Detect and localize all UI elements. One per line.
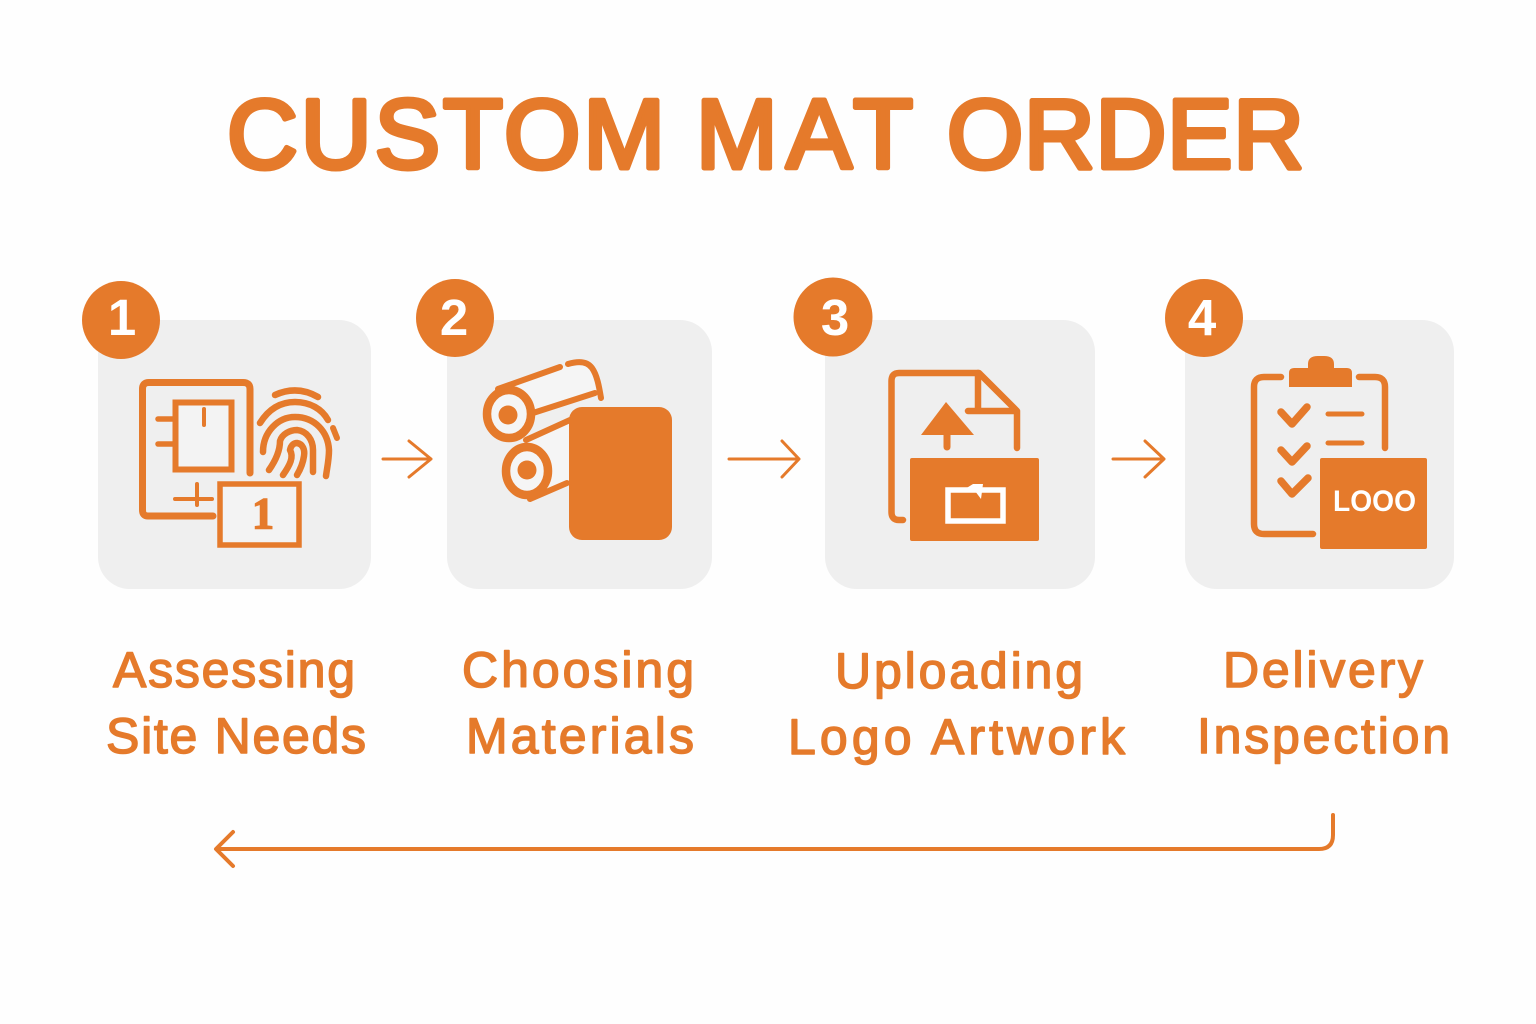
panel: step 4 delivery inspection (1165, 279, 1454, 589)
title (227, 79, 1304, 189)
badge 1 (82, 281, 160, 359)
return arrow (216, 815, 1333, 866)
label: uploading logo artwork: Uploading (835, 643, 1083, 699)
label: assessing site needs: Site Needs (106, 708, 366, 764)
label: choosing materials (462, 642, 694, 764)
badge 3: 3 (821, 289, 849, 346)
badge 4: 4 (1188, 289, 1217, 346)
icon: site plan and fingerprint (142, 382, 337, 545)
label: uploading logo artwork: Logo Artwork (788, 709, 1126, 765)
badge 3 (794, 278, 872, 356)
card background 2 (447, 320, 712, 589)
arrow 3 to 4 (1113, 441, 1164, 477)
icon: clipboard checklist and logo (1254, 356, 1427, 549)
label: choosing materials: Materials (466, 708, 694, 764)
icon: site plan and fingerprint: 1 (252, 489, 274, 538)
arrow 2 to 3 (729, 441, 799, 477)
label: delivery inspection (1197, 642, 1450, 764)
panel: step 2 choosing materials (416, 279, 712, 589)
title: ORDER (947, 79, 1304, 189)
label: uploading logo artwork (788, 643, 1126, 765)
card background 3 (825, 320, 1095, 589)
card background 4 (1185, 320, 1454, 589)
icon: clipboard checklist and logo: LOOO (1333, 485, 1416, 518)
label: assessing site needs: Assessing (113, 642, 355, 698)
badge 1: 1 (108, 289, 136, 346)
label: delivery inspection: Inspection (1197, 708, 1450, 764)
label: delivery inspection: Delivery (1223, 642, 1423, 698)
panel: step 3 uploading logo artwork (794, 278, 1095, 589)
panel: step 1 assessing site needs (82, 281, 371, 589)
label: assessing site needs (106, 642, 366, 764)
label: choosing materials: Choosing (462, 642, 694, 698)
badge 4 (1165, 279, 1243, 357)
icon: material rolls and sheet (487, 362, 672, 540)
badge 2 (416, 279, 494, 357)
title: CUSTOM (227, 79, 665, 189)
arrow 1 to 2 (383, 441, 431, 477)
badge 2: 2 (440, 289, 468, 346)
title: MAT (696, 79, 913, 189)
card background 1 (98, 320, 371, 589)
icon: file upload and logo (892, 373, 1039, 541)
